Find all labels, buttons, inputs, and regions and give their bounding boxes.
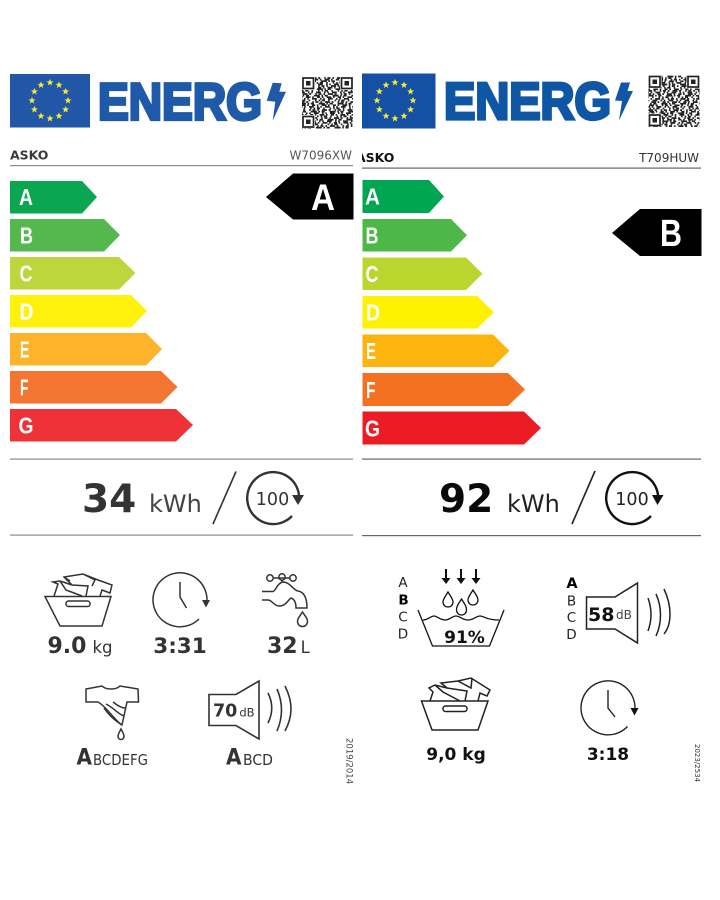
icon: 100 cycles: 100	[256, 490, 289, 510]
icon: speaker with noise level: 70dB	[213, 702, 255, 722]
bar D: D	[20, 298, 34, 324]
bar B	[362, 219, 467, 252]
bar E: E	[366, 338, 376, 364]
text: supplier name: ASKO	[356, 150, 394, 165]
text: noise class letters: B	[567, 594, 576, 610]
text: spin class	[76, 744, 148, 770]
panel: right energy label	[356, 72, 702, 783]
heading: ENERG logotype: ENERG	[444, 72, 611, 130]
panel: left energy label	[10, 72, 354, 784]
icon: speaker with noise level	[586, 583, 670, 643]
text: capacity: 9.0 kg	[48, 634, 113, 659]
heading: ENERG logotype: ENERG	[98, 72, 262, 130]
text: spin class letters: B	[398, 592, 409, 608]
text: noise class letters	[566, 576, 578, 643]
icon: 100 cycles: 100	[615, 490, 649, 510]
icon: laundry basket	[422, 678, 490, 730]
energy consumption: 92 kWh per 100 cycles: kWh	[507, 490, 560, 518]
text: noise class: A	[226, 744, 242, 770]
icon: laundry basket	[45, 574, 112, 626]
bar C: C	[366, 261, 378, 287]
bar C	[362, 258, 482, 290]
icon: clock	[153, 573, 210, 627]
text: noise class letters: C	[567, 610, 576, 626]
bar G: G	[18, 412, 34, 438]
icon: speaker with noise level	[209, 681, 291, 739]
bar B: B	[366, 222, 378, 248]
bar A	[10, 181, 97, 214]
text: water consumption: 32L	[267, 634, 311, 659]
text: duration: 3:18	[587, 745, 629, 765]
energy consumption: 34 kWh per 100 cycles: kWh	[149, 490, 202, 518]
bar B: B	[20, 222, 33, 248]
energy consumption: 92 kWh per 100 cycles: 92	[439, 477, 493, 522]
text: spin class letters: D	[398, 626, 408, 642]
text: noise class letters: D	[566, 627, 577, 643]
bar A: A	[19, 184, 33, 210]
icon: 100 cycles	[606, 472, 664, 524]
text: spin efficiency: 91%	[444, 628, 485, 648]
energy consumption: 92 kWh per 100 cycles	[439, 471, 664, 524]
text: spin class letters: A	[398, 575, 408, 591]
text: supplier name: ASKO	[10, 148, 48, 162]
text: capacity: 9,0 kg	[426, 745, 486, 765]
icon: lightning bolt	[267, 83, 286, 121]
bar D	[362, 296, 494, 328]
bar E	[10, 333, 162, 366]
icon: water tap	[262, 574, 308, 626]
bar F: F	[20, 374, 28, 400]
bar E: E	[20, 336, 30, 362]
text: model number: W7096XW	[290, 148, 352, 162]
icon: EU flag	[362, 74, 436, 128]
chart: energy scale A to G	[362, 180, 541, 444]
text: spin class letters	[398, 575, 409, 642]
bar F: F	[366, 377, 376, 403]
bar F	[10, 371, 178, 404]
rating arrow A	[266, 174, 354, 220]
text: noise class letters: A	[566, 576, 578, 592]
bar G	[362, 412, 541, 444]
chart: energy scale A to G	[10, 181, 193, 442]
text: noise class	[226, 744, 273, 770]
text: duration: 3:31	[153, 634, 207, 659]
bar G	[10, 409, 193, 442]
icon: clock	[581, 681, 638, 735]
bar A: A	[365, 184, 380, 210]
bar E	[362, 334, 510, 367]
bar B	[10, 219, 120, 252]
text: regulation number: 2023/2534	[693, 744, 701, 783]
icon: QR code	[648, 76, 700, 126]
text: noise class: BCD	[243, 751, 273, 769]
rating arrow B	[612, 209, 702, 256]
bar F	[362, 373, 525, 406]
icon: speaker with noise level: 58	[588, 604, 614, 626]
rating arrow B: B	[660, 213, 682, 255]
bar D: D	[366, 300, 380, 326]
bar C: C	[20, 260, 32, 286]
icon: EU flag	[10, 74, 90, 128]
bar A	[362, 180, 444, 213]
energy consumption: 34 kWh per 100 cycles	[82, 472, 304, 524]
text: spin class: BCDEFG	[93, 751, 148, 769]
energy consumption: 34 kWh per 100 cycles: 34	[82, 477, 136, 522]
text: model number: T709HUW	[638, 151, 699, 165]
icon: lightning bolt	[615, 82, 633, 120]
icon: QR code	[302, 77, 353, 128]
icon: wash basin with drops	[418, 569, 504, 648]
bar G: G	[365, 416, 380, 442]
bar C	[10, 257, 136, 290]
text: spin class letters: C	[398, 610, 408, 626]
bar D	[10, 295, 147, 328]
text: spin class: A	[76, 744, 93, 770]
rating arrow A: A	[311, 177, 335, 218]
icon: 100 cycles	[247, 472, 304, 524]
icon: speaker with noise level: dB	[616, 608, 632, 622]
icon: spin shirt	[86, 686, 138, 740]
text: regulation number: 2019/2014	[344, 738, 354, 784]
